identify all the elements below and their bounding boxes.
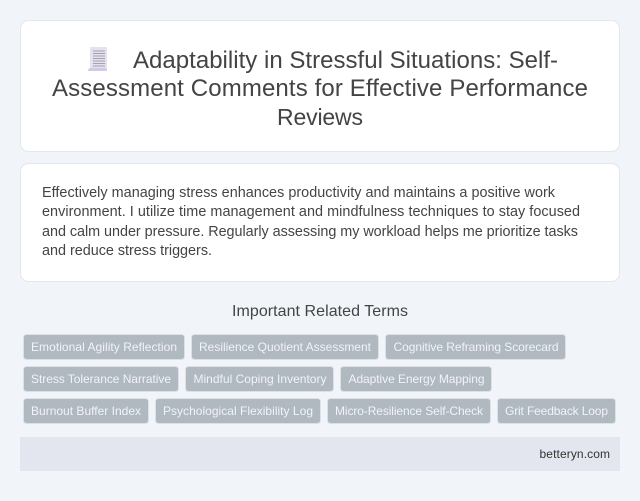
title [52,47,588,130]
icon: document scroll [88,47,107,71]
footer text: betteryn.com [540,447,610,461]
tag: Adaptive Energy Mapping [340,366,492,392]
tag: Cognitive Reframing Scorecard: Cognitive Reframing Scorecard [394,340,558,354]
tag: Cognitive Reframing Scorecard [386,334,566,360]
tag: Micro-Resilience Self-Check [328,398,490,424]
tag: Stress Tolerance Narrative: Stress Tolerance Narrative [31,372,171,386]
description text [42,185,580,259]
tag: Emotional Agility Reflection [24,334,184,360]
footer bar [20,437,620,471]
heading: related terms: Important Related Terms [232,303,408,320]
title: Reviews [277,104,363,130]
tag: Resilience Quotient Assessment [192,334,378,360]
tag: Mindful Coping Inventory: Mindful Coping Inventory [194,372,326,386]
tag: Grit Feedback Loop: Grit Feedback Loop [505,404,608,418]
description text: and reduce stress triggers. [42,243,212,259]
description text: Effectively managing stress enhances productivity and maintains a positive work [42,185,556,201]
tag: Psychological Flexibility Log [156,398,320,424]
panel: title card [20,20,620,152]
tag: Stress Tolerance Narrative [24,366,178,392]
description text: and calm under pressure. Regularly assessing my workload helps me prioritize tasks [42,224,578,240]
tag: Micro-Resilience Self-Check: Micro-Resilience Self-Check [335,404,484,418]
tag: Burnout Buffer Index: Burnout Buffer Index [31,404,141,418]
tag list [24,334,616,424]
tag: Grit Feedback Loop [498,398,616,424]
panel: description card [20,164,620,282]
tag: Adaptive Energy Mapping: Adaptive Energy Mapping [348,372,484,386]
tag: Psychological Flexibility Log: Psychological Flexibility Log [163,404,313,418]
tag: Burnout Buffer Index [24,398,148,424]
title: Adaptability in Stressful Situations: Self- [133,47,558,74]
tag: Mindful Coping Inventory [186,366,334,392]
title: Assessment Comments for Effective Performance [52,75,588,102]
description text: environment. I utilize time management and mindfulness techniques to stay focused [42,204,580,220]
tag: Emotional Agility Reflection: Emotional Agility Reflection [31,340,177,354]
tag: Resilience Quotient Assessment: Resilience Quotient Assessment [199,340,372,354]
